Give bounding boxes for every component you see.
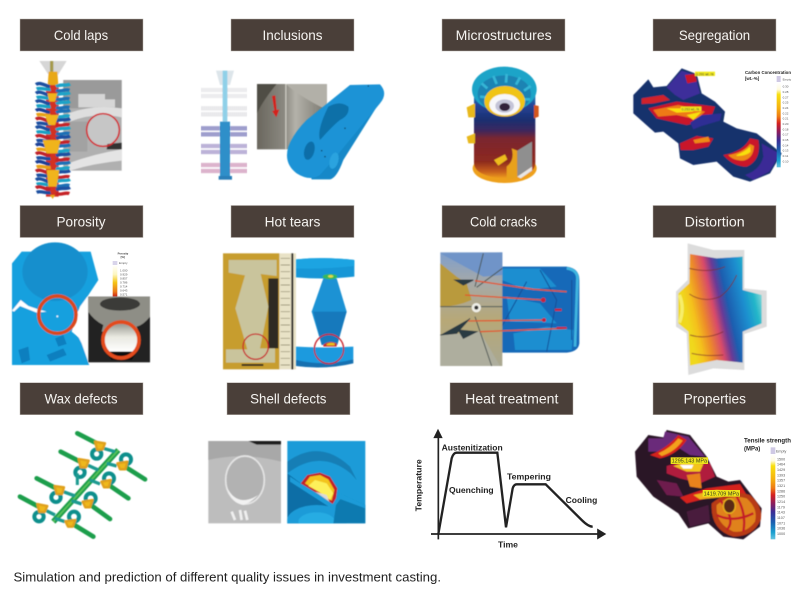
panel: microstructures bbox=[442, 19, 565, 183]
heading: Inclusions bbox=[231, 19, 354, 51]
panel: cold laps bbox=[20, 19, 143, 199]
legend: tensile strength: 1250 bbox=[777, 495, 785, 499]
heading: Distortion: Distortion bbox=[685, 215, 745, 230]
label: 1419.709 MPa: 1419.709 MPa bbox=[704, 491, 740, 497]
legend: porosity scale: 0.571 bbox=[120, 292, 128, 296]
label: 1295.143 MPa: 1295.143 MPa bbox=[672, 459, 708, 465]
panel: wax defects bbox=[20, 383, 145, 537]
legend: tensile strength: 1393 bbox=[777, 473, 785, 477]
legend: carbon concentration: 0.18 bbox=[783, 127, 789, 131]
heading: Microstructures: Microstructures bbox=[456, 28, 552, 43]
legend: porosity scale: 1.000 bbox=[120, 268, 128, 272]
chart: carbon segregation map: 0.253 wt.-% bbox=[682, 107, 699, 111]
heading: Cold laps bbox=[20, 19, 143, 51]
chart: carbon segregation map: 0.291 wt.-% bbox=[696, 72, 714, 76]
heading: Porosity: Porosity bbox=[56, 215, 106, 230]
panel: segregation bbox=[633, 19, 792, 182]
legend: porosity scale: 0.643 bbox=[120, 288, 128, 292]
label: Austenitization: Austenitization bbox=[442, 442, 503, 452]
chart: porosity simulation in blue casting bbox=[12, 242, 98, 365]
legend: carbon concentration: 0.17 bbox=[783, 133, 789, 137]
chart: cylindrical casting microstructure map bbox=[467, 67, 539, 183]
heading: Shell defects bbox=[227, 383, 350, 415]
image: hot tear specimen photo with ruler bbox=[223, 253, 296, 369]
panel: porosity bbox=[12, 206, 150, 365]
heading: Heat treatment: Heat treatment bbox=[465, 392, 559, 406]
legend: tensile strength: (MPa) bbox=[744, 447, 760, 453]
legend: tensile strength: 1214 bbox=[777, 500, 785, 504]
panel: shell defects bbox=[208, 383, 365, 538]
label: Cooling: Cooling bbox=[566, 495, 597, 505]
heading: Wax defects bbox=[20, 383, 143, 415]
chart: cold laps simulation tree bbox=[36, 61, 70, 199]
heading: Segregation: Segregation bbox=[679, 28, 750, 43]
legend: carbon concentration: 0.20 bbox=[783, 122, 789, 126]
label: Quenching: Quenching bbox=[449, 485, 494, 495]
chart: hot tear simulation dog-bone bbox=[296, 258, 354, 367]
legend: tensile strength: 1000 bbox=[777, 532, 785, 536]
heading: Hot tears: Hot tears bbox=[265, 215, 321, 230]
legend: tensile strength: 1286 bbox=[777, 489, 785, 493]
image: blue clevis part bbox=[287, 84, 384, 179]
legend: tensile strength: 1429 bbox=[777, 468, 785, 472]
legend: carbon concentration: [wt.-%] bbox=[745, 76, 760, 81]
legend: tensile strength: 1036 bbox=[777, 527, 785, 531]
chart: distortion contour map bbox=[676, 243, 767, 375]
caption: Simulation and prediction of different quality issues in investment casting. bbox=[14, 570, 441, 584]
legend: tensile strength: 1500 bbox=[777, 457, 785, 461]
heading: Heat treatment bbox=[450, 383, 573, 415]
legend: tensile strength: 1357 bbox=[777, 479, 785, 483]
panel: cold cracks bbox=[440, 206, 579, 366]
panel: distortion bbox=[653, 206, 776, 375]
heading: Inclusions: Inclusions bbox=[262, 28, 323, 43]
arrow: temperature axis bbox=[435, 431, 441, 539]
legend: porosity scale: 0.929 bbox=[120, 272, 128, 276]
chart: tensile strength map bbox=[635, 430, 762, 539]
legend: carbon concentration: 0.28 bbox=[783, 90, 789, 94]
legend: carbon concentration: 0.21 bbox=[783, 117, 789, 121]
label: Temperature: Temperature bbox=[414, 459, 424, 511]
chart: carbon segregation map bbox=[633, 68, 782, 182]
heading: Distortion bbox=[653, 206, 776, 238]
chart: inclusion particles in tree bbox=[201, 71, 247, 180]
legend: tensile strength bbox=[744, 439, 791, 539]
panel: properties bbox=[635, 383, 791, 539]
chart: wax tree simulation bbox=[20, 433, 145, 537]
panel: heat treatment bbox=[414, 383, 605, 550]
heading: Cold cracks bbox=[442, 206, 565, 238]
label: Tempering: Tempering bbox=[507, 472, 551, 482]
legend: tensile strength: 1179 bbox=[777, 505, 785, 509]
legend: carbon concentration: 0.14 bbox=[783, 143, 789, 147]
heading: Shell defects: Shell defects bbox=[250, 392, 327, 406]
heading: Hot tears bbox=[231, 206, 354, 238]
temperature curve bbox=[438, 453, 593, 534]
legend: carbon concentration: Empty bbox=[783, 78, 792, 82]
label: Time: Time bbox=[498, 540, 518, 550]
heading: Microstructures bbox=[442, 19, 565, 51]
legend: carbon concentration: 0.25 bbox=[783, 101, 789, 105]
heading: Properties: Properties bbox=[684, 392, 746, 406]
legend: carbon concentration: 0.30 bbox=[783, 85, 789, 89]
legend: porosity scale: 0.714 bbox=[120, 284, 128, 288]
arrow: time axis bbox=[431, 530, 605, 538]
panel: hot tears bbox=[223, 206, 354, 369]
heading: Porosity bbox=[20, 206, 143, 238]
legend: carbon concentration: 0.15 bbox=[783, 138, 789, 142]
legend: tensile strength: 1321 bbox=[777, 484, 785, 488]
legend: porosity scale: Empty bbox=[119, 261, 128, 265]
heading: Wax defects: Wax defects bbox=[44, 392, 118, 406]
legend: tensile strength: 1107 bbox=[777, 516, 785, 520]
legend: carbon concentration: 0.11 bbox=[783, 154, 789, 158]
legend: tensile strength: 1143 bbox=[777, 511, 785, 515]
legend: carbon concentration: Carbon Concentration bbox=[745, 70, 791, 75]
legend: carbon concentration bbox=[745, 70, 792, 167]
legend: tensile strength: Empty bbox=[776, 449, 787, 453]
heading: Cold laps: Cold laps bbox=[54, 28, 108, 43]
heading: Segregation bbox=[653, 19, 776, 51]
legend: carbon concentration: 0.27 bbox=[783, 95, 789, 99]
panel: inclusions bbox=[201, 19, 384, 180]
chart: shell defect simulation bbox=[286, 440, 366, 524]
legend: carbon concentration: 0.10 bbox=[783, 159, 789, 163]
legend: porosity scale: Porosity bbox=[118, 251, 129, 255]
legend: porosity scale: 0.786 bbox=[120, 280, 128, 284]
image: cracked casting photo and simulation bbox=[440, 252, 579, 366]
legend: carbon concentration: 0.22 bbox=[783, 111, 789, 115]
legend: tensile strength: 1464 bbox=[777, 463, 785, 467]
legend: porosity scale: 0.857 bbox=[120, 276, 128, 280]
legend: porosity scale: [%] bbox=[121, 255, 125, 259]
image: casting photo with red circle bbox=[63, 80, 122, 171]
image: inclusion photo with red arrow bbox=[257, 84, 327, 149]
heading: Properties bbox=[653, 383, 776, 415]
legend: carbon concentration: 0.24 bbox=[783, 106, 789, 110]
legend: tensile strength: Tensile strength bbox=[744, 439, 791, 445]
heading: Cold cracks: Cold cracks bbox=[470, 215, 537, 230]
legend: porosity scale bbox=[113, 251, 129, 297]
legend: tensile strength: 1071 bbox=[777, 521, 785, 525]
legend: carbon concentration: 0.13 bbox=[783, 149, 789, 153]
image: shell defect photo bbox=[208, 441, 281, 523]
chart: heat treatment curve bbox=[414, 431, 605, 550]
image: porosity photo with red circle bbox=[88, 297, 150, 362]
